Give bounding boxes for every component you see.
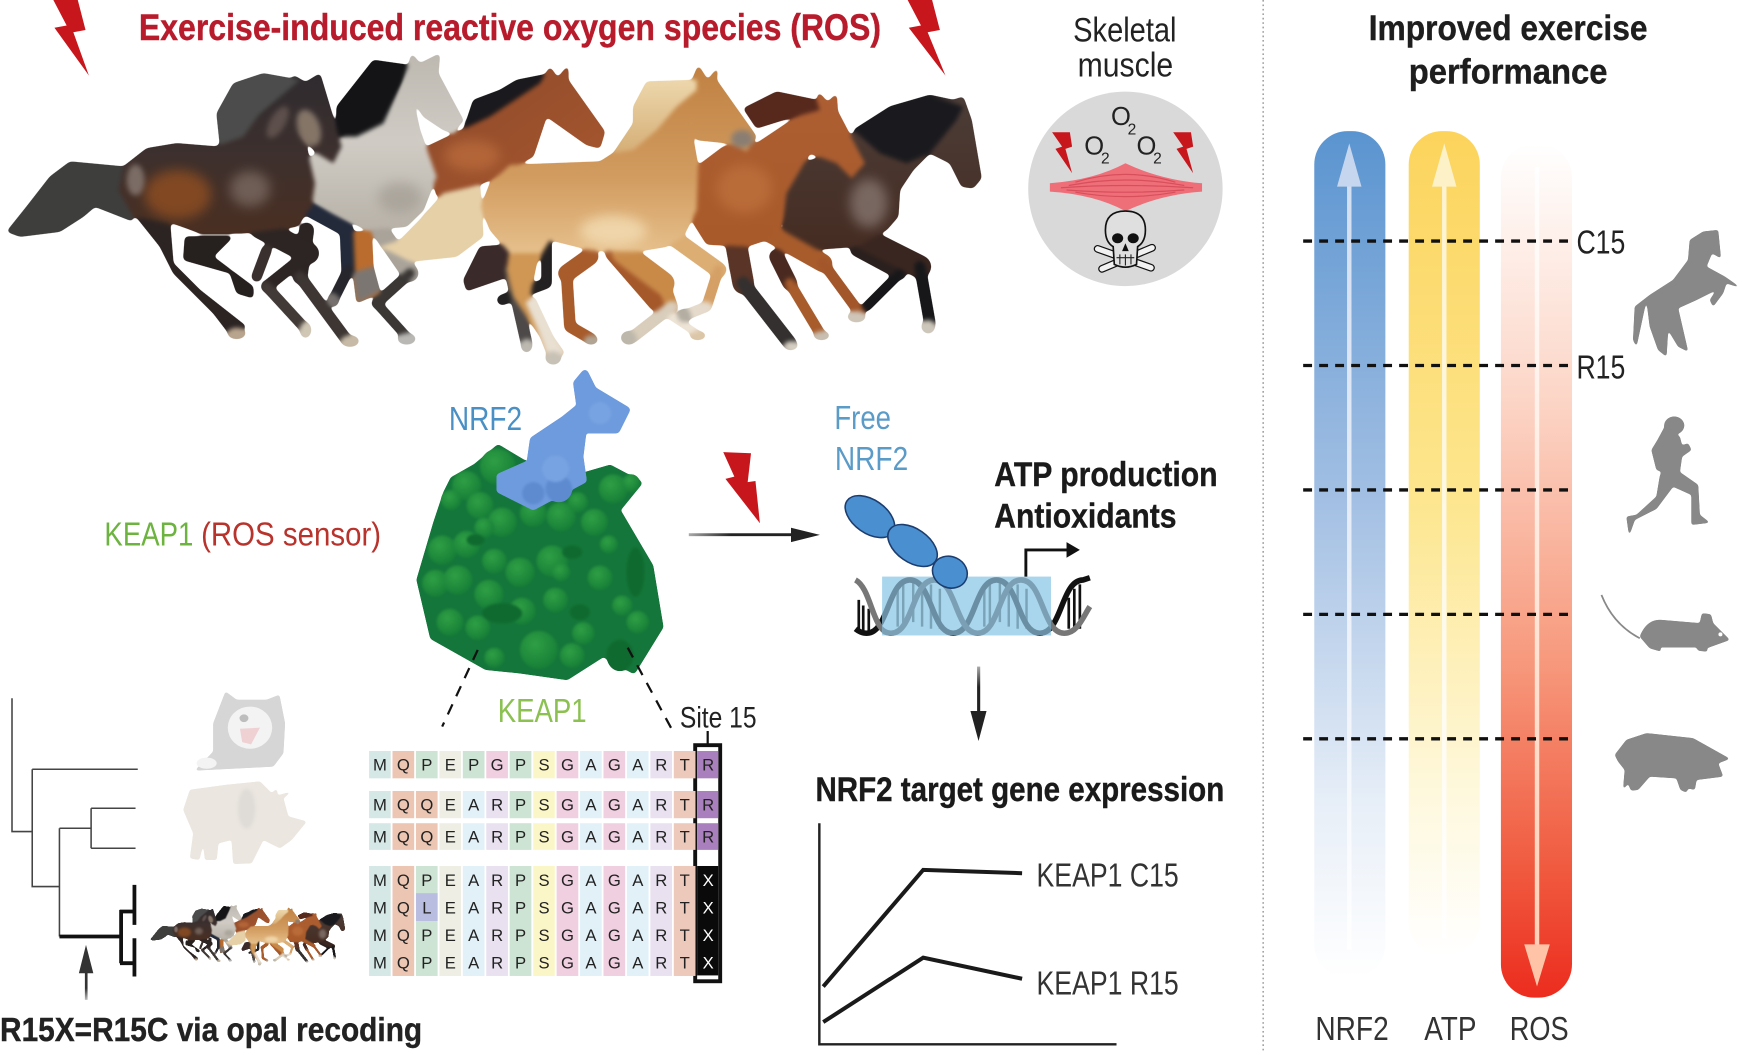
rows 4 to 7 cells [369, 866, 695, 976]
rows 2 and 3 cells [369, 791, 695, 850]
level labels [1576, 224, 1625, 386]
sequence letters: MQQEARPSGAGARTR [373, 795, 714, 814]
icon: pig silhouette [1615, 733, 1730, 793]
horse: grey dapple [307, 53, 463, 344]
icon: mouse silhouette [1601, 595, 1730, 652]
sequence letters: X [703, 898, 714, 917]
phylogenetic tree [12, 698, 138, 977]
dashed level lines [1303, 241, 1572, 739]
sequence letters: MQPEARPSGAGART [373, 953, 690, 972]
level labels: R15 [1576, 349, 1625, 386]
label: skeletal muscle: Skeletal [1073, 12, 1177, 50]
label: KEAP1: KEAP1 [498, 693, 587, 730]
label: KEAP1 ROS sensor: KEAP1 [104, 516, 193, 553]
icon: skull and crossbones [1098, 211, 1152, 269]
horse: bay behind grey [427, 65, 605, 197]
arrow: up to horse branch [79, 945, 93, 1000]
dashed zoom lines [442, 648, 672, 730]
title: exercise-induced ROS: Exercise-induced reactive oxygen species (ROS) [139, 7, 881, 48]
sequence letters: MQLEARPSGAGART [373, 898, 690, 917]
line: KEAP1 R15 [823, 958, 1022, 1022]
DNA outer rungs and strands [855, 578, 1090, 633]
chart: KEAP1 C15 and R15 expression lines [819, 823, 1179, 1044]
illustration: NRF2 peptide surface [500, 373, 627, 507]
label: NRF2: NRF2 [449, 401, 522, 438]
sequence letters: MQQEARPSGAGARTR [373, 828, 714, 847]
column: NRF2 [1314, 131, 1385, 978]
label: free NRF2: Free [834, 400, 891, 437]
image: faded dog [195, 692, 285, 771]
label: free NRF2 [834, 400, 908, 478]
label: ATP production antioxidants: Antioxidants [994, 498, 1177, 536]
sequence letters: MQPEPGPSGAGARTR [373, 755, 714, 774]
image: small running horses [150, 905, 345, 965]
heading: improved exercise performance: performance [1409, 51, 1608, 91]
column labels: ATP [1424, 1011, 1476, 1048]
line labels: KEAP1 R15 [1037, 965, 1179, 1002]
sequence letters: MQPEARPSGAGART [373, 926, 690, 945]
highlighted binding region [882, 577, 1051, 635]
image: faded rhino [183, 782, 307, 864]
DNA strands inside region [882, 577, 1051, 636]
column labels [1315, 1011, 1569, 1048]
label: ATP production antioxidants [994, 456, 1218, 536]
icon: lightning bolt left [53, 0, 89, 76]
sequence letters: X [703, 953, 714, 972]
label: site 15: Site 15 [680, 702, 757, 735]
column: ATP [1409, 131, 1480, 955]
icon: muscle [1050, 163, 1202, 211]
NRF2 domains [838, 487, 973, 594]
heading: NRF2 target gene expression: NRF2 target gene expression [815, 771, 1224, 809]
oxygen labels [1084, 103, 1162, 167]
oxygen labels: O [1084, 132, 1104, 160]
axes [819, 823, 1117, 1044]
oxygen labels: 2 [1101, 150, 1110, 167]
chart: NRF2 ATP ROS gradient columns [1303, 131, 1625, 1048]
icon: skeletal muscle circle [1028, 92, 1223, 286]
sequence letters: MQPEARPSGAGART [373, 871, 690, 890]
horse: chestnut [693, 92, 865, 350]
heading: improved exercise performance [1369, 8, 1648, 91]
row 1 cells [369, 751, 695, 778]
label: free NRF2: NRF2 [835, 441, 908, 478]
table: sequence alignment [369, 731, 722, 983]
illustration: DNA with NRF2 bound [838, 487, 1090, 635]
heading: improved exercise performance: Improved exercise [1369, 8, 1648, 48]
icon: lightning bolt right [908, 0, 945, 76]
icon: small bolts [1052, 132, 1193, 173]
horse: dark bay left [7, 73, 359, 347]
column: ROS [1501, 144, 1572, 998]
TSS arrow [1026, 542, 1080, 577]
label: skeletal muscle [1073, 12, 1177, 85]
arrow: to target gene expression [970, 667, 987, 741]
line: KEAP1 C15 [823, 870, 1022, 987]
sequence letters: X [703, 926, 714, 945]
oxygen labels: 2 [1128, 121, 1136, 138]
sequence letters [373, 755, 714, 972]
line labels [1037, 858, 1179, 1002]
arrow: to free NRF2 [689, 528, 820, 542]
oxygen labels: O [1111, 103, 1131, 131]
column labels: ROS [1510, 1011, 1569, 1048]
column site 15 frame [693, 731, 722, 983]
sequence letters: X [703, 871, 714, 890]
horse: palomino front [380, 65, 757, 364]
label: KEAP1 ROS sensor [104, 516, 381, 553]
icon: runner silhouette [1626, 417, 1710, 536]
column labels: NRF2 [1315, 1011, 1389, 1048]
divider [1262, 0, 1264, 1052]
icon: central lightning bolt [723, 452, 760, 523]
level labels: C15 [1576, 224, 1625, 261]
label: ATP production antioxidants: ATP production [994, 456, 1218, 494]
oxygen labels: O [1137, 132, 1156, 160]
icon: rearing horse silhouette [1633, 230, 1741, 357]
illustration: KEAP1 protein surface [420, 448, 660, 677]
label: skeletal muscle: muscle [1078, 47, 1173, 85]
image: group of running horses [7, 53, 982, 364]
label: R15X=R15C via opal recoding: R15X=R15C via opal recoding [0, 1012, 422, 1049]
dark tail behind palomino [463, 244, 511, 291]
label: KEAP1 ROS sensor: (ROS sensor) [201, 516, 381, 553]
horse: dark bay far right [783, 95, 982, 333]
oxygen labels: 2 [1153, 150, 1162, 167]
line labels: KEAP1 C15 [1037, 858, 1179, 895]
